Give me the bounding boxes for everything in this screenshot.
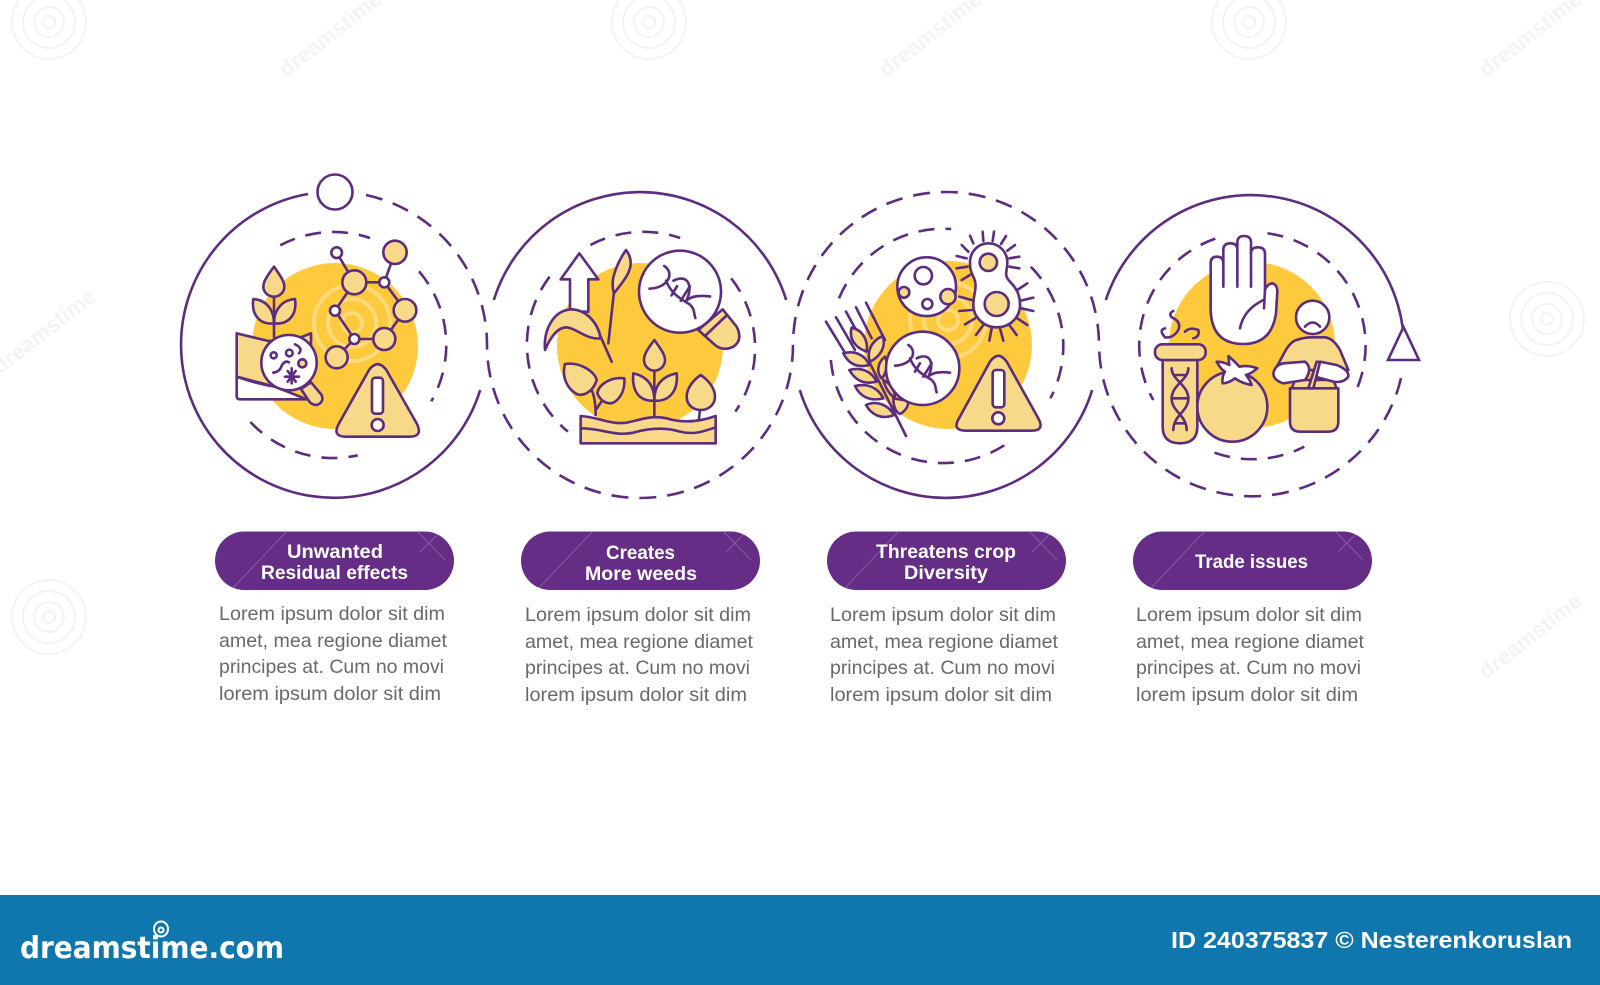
warning triangle [957, 356, 1041, 431]
body text: Lorem ipsum dolor sit dim [219, 603, 445, 625]
seedling middle [633, 340, 677, 415]
pill title: More weeds [585, 563, 697, 585]
step 3 label [827, 532, 1066, 706]
dashed wave through all circles [366, 192, 1401, 498]
body text: lorem ipsum dolor sit dim [219, 683, 441, 705]
pill title [585, 542, 697, 585]
logo wordmark: dreamstime.com [20, 931, 284, 966]
body text [525, 604, 754, 706]
curved weed leaf [545, 309, 612, 362]
solid arc: circle 4 [1106, 195, 1404, 352]
end marker triangle [1388, 327, 1419, 360]
seedling right [687, 375, 715, 418]
pill title: Diversity [904, 562, 988, 584]
icon panel 2: creates more weeds [545, 250, 739, 443]
logo spiral [154, 922, 168, 936]
stop hand [1211, 236, 1277, 344]
bacterium [957, 232, 1033, 341]
image credit: ID 240375837 © Nesterenkoruslan [1171, 927, 1572, 953]
yellow blob: circle 2 [557, 263, 723, 429]
body text: Lorem ipsum dolor sit dim [830, 604, 1056, 626]
inner dashed rings [250, 229, 1366, 463]
body text [219, 603, 448, 705]
shopping bag and arms [1273, 362, 1348, 432]
body text: principes at. Cum no movi [1136, 657, 1361, 679]
solid arc: circle 3 [800, 390, 1092, 498]
step 1 label [215, 532, 454, 705]
body text: principes at. Cum no movi [525, 657, 750, 679]
pill title: Unwanted [287, 541, 383, 563]
pill title [261, 541, 408, 584]
pill: unwanted residual effects [215, 532, 454, 590]
pill title: Creates [606, 542, 675, 564]
watermark pattern [0, 0, 1586, 684]
body text: Lorem ipsum dolor sit dim [1136, 604, 1362, 626]
yellow blob: circle 4 [1169, 262, 1335, 428]
body text: Lorem ipsum dolor sit dim [525, 604, 751, 626]
pill title [876, 541, 1016, 584]
plant [253, 267, 295, 337]
body text [830, 604, 1059, 706]
watermark pattern: dreamstime [1474, 588, 1586, 684]
magnifier with DNA [639, 251, 739, 349]
body text: amet, mea regione diamet [830, 631, 1059, 653]
body text: amet, mea regione diamet [219, 630, 448, 652]
soil box [237, 333, 311, 399]
icon panel 3: threatens crop diversity [826, 232, 1041, 436]
step 2 label [521, 532, 760, 706]
body text: lorem ipsum dolor sit dim [525, 684, 747, 706]
solid arc: circle 2 [494, 192, 786, 300]
sad person [1275, 301, 1348, 370]
footer banner [0, 895, 1600, 985]
icon panel 4: trade issues [1155, 236, 1348, 443]
pill watermark lines [1151, 532, 1363, 588]
body text: lorem ipsum dolor sit dim [1136, 684, 1358, 706]
upright weed leaf [608, 250, 631, 343]
growth arrow [561, 253, 598, 312]
connecting outlines [181, 174, 1419, 498]
pill watermark lines [539, 532, 751, 588]
body text: principes at. Cum no movi [830, 657, 1055, 679]
pill title: Residual effects [261, 562, 408, 584]
pill title: Threatens crop [876, 541, 1016, 563]
body text: principes at. Cum no movi [219, 656, 444, 678]
step 4 label [1133, 532, 1372, 706]
watermark spirals on blobs [314, 282, 986, 361]
solid arc: circle 1 [181, 194, 480, 498]
pill title: Trade issues [1195, 551, 1308, 573]
body text [1136, 604, 1365, 706]
body text: lorem ipsum dolor sit dim [830, 684, 1052, 706]
molecule [326, 241, 416, 368]
body text: amet, mea regione diamet [1136, 631, 1365, 653]
test tube with DNA [1155, 311, 1206, 443]
pill watermark lines [233, 532, 445, 588]
soil [581, 416, 716, 443]
icon panel 1: residual effects [237, 241, 419, 437]
pill watermark lines [845, 532, 1057, 588]
body text: amet, mea regione diamet [525, 631, 754, 653]
warning triangle [336, 364, 419, 437]
pill: creates more weeds [521, 532, 760, 590]
tomato [1197, 356, 1267, 442]
spotted cell [897, 257, 956, 316]
pill: threatens crop diversity [827, 532, 1066, 590]
start marker circle [318, 174, 352, 210]
seedling left [564, 364, 624, 415]
magnifier with microbes [261, 335, 322, 405]
pill: trade issues [1133, 532, 1372, 590]
wheat ear [826, 303, 908, 436]
yellow blob: circle 3 [864, 261, 1032, 429]
yellow blob: circle 1 [252, 263, 418, 429]
DNA circle [886, 332, 959, 405]
